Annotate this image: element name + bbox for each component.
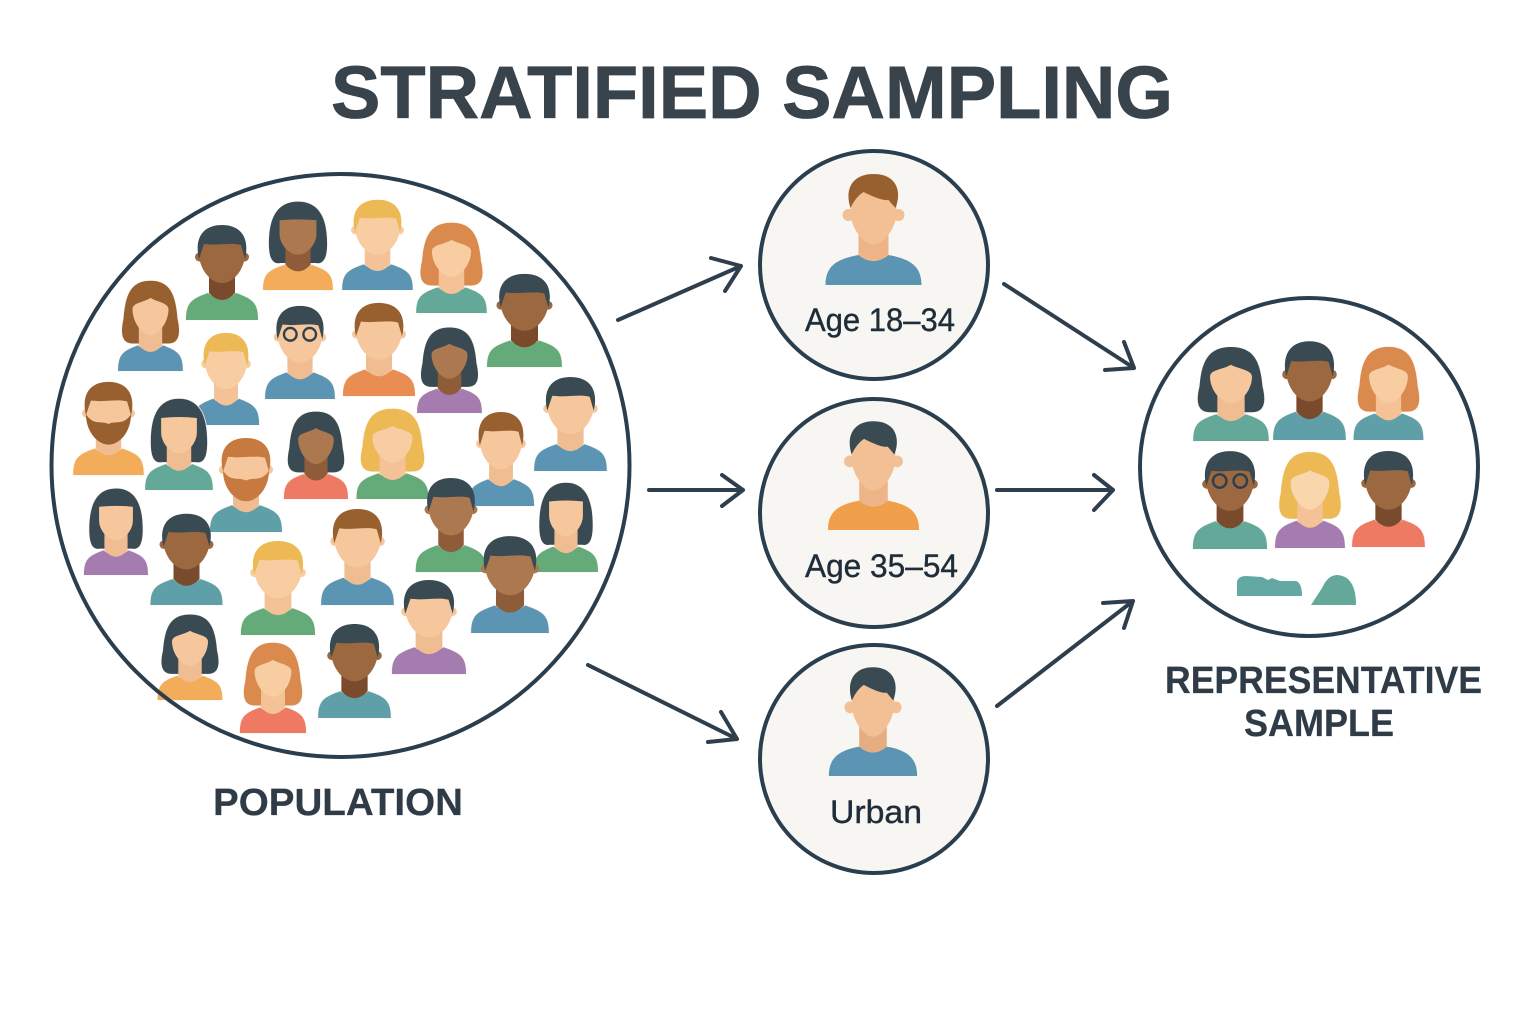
person icon [826, 174, 922, 285]
label line 2: SAMPLE [1244, 703, 1394, 745]
person: ginger bearded man [210, 438, 282, 532]
panel: representative sample [1140, 298, 1478, 636]
person: bob woman green shirt right [534, 483, 598, 572]
arrow: age 35-54 to sample [997, 475, 1113, 510]
stratum circle [760, 151, 988, 379]
person: man brown blue shirt [468, 412, 534, 506]
panel: population [52, 174, 630, 757]
person: ginger woman red shirt [240, 643, 306, 733]
person: man brown skin green shirt [416, 478, 486, 572]
person: ginger woman [416, 223, 487, 313]
person: blond man green shirt [241, 541, 315, 635]
stratum label: Urban [830, 794, 922, 830]
person: man dark skin green shirt right [487, 274, 562, 367]
label line 1: REPRESENTATIVE [1165, 660, 1482, 702]
person: blond woman green shirt [356, 409, 428, 499]
person: man with glasses [265, 306, 335, 399]
person: man dark skin green shirt [186, 225, 258, 320]
person: bob woman purple shirt [84, 489, 148, 575]
person: ginger woman [1354, 347, 1423, 440]
population label: POPULATION [213, 782, 463, 824]
person icon [829, 667, 917, 776]
person: dark woman red shirt [284, 412, 348, 499]
person: man brown hair blue shirt [321, 509, 394, 605]
person: dark hair woman [1193, 347, 1269, 441]
person: woman brown hair [118, 281, 183, 371]
stratum label: Age 35–54 [805, 548, 958, 584]
person: man red shirt [1352, 451, 1425, 547]
arrow: age 18-34 to sample [1004, 284, 1134, 370]
sample circle [1140, 298, 1478, 636]
person: bearded man [73, 382, 144, 475]
person: man purple shirt [392, 580, 466, 674]
person: dark woman purple shirt [417, 328, 482, 413]
person: woman bob orange shirt [263, 202, 333, 290]
person: man with glasses [1193, 451, 1267, 549]
person: man dark hair blue shirt [534, 377, 607, 471]
stratum circle [760, 645, 988, 873]
arrow: population to urban [588, 665, 737, 742]
partial person fragment right [1311, 575, 1356, 605]
population circle [52, 174, 630, 757]
person: man dark skin teal shirt [318, 624, 391, 718]
person: bob woman green shirt [145, 399, 213, 490]
title: STRATIFIED SAMPLING [331, 51, 1173, 134]
stratum label: Age 18–34 [805, 302, 955, 338]
person: man orange shirt [343, 303, 415, 396]
person: blond man blue shirt [193, 333, 259, 425]
person: man dark teal shirt [150, 514, 222, 605]
panel: age 18-34 stratum [760, 151, 988, 379]
person icon [828, 421, 919, 530]
person: man brown skin blue shirt [471, 536, 549, 633]
panel: urban stratum [760, 645, 988, 873]
person: blond man [342, 200, 413, 290]
person: blond woman [1275, 452, 1345, 548]
person: woman orange shirt [158, 614, 222, 700]
partial person fragment left [1237, 576, 1302, 596]
representative sample label [1165, 660, 1482, 745]
arrow: population to age 35-54 [649, 475, 743, 506]
person: man dark skin [1273, 341, 1346, 440]
arrow: population to age 18-34 [618, 258, 741, 320]
panel: age 35-54 stratum [760, 399, 988, 627]
arrow: urban to sample [997, 601, 1133, 706]
stratum circle [760, 399, 988, 627]
